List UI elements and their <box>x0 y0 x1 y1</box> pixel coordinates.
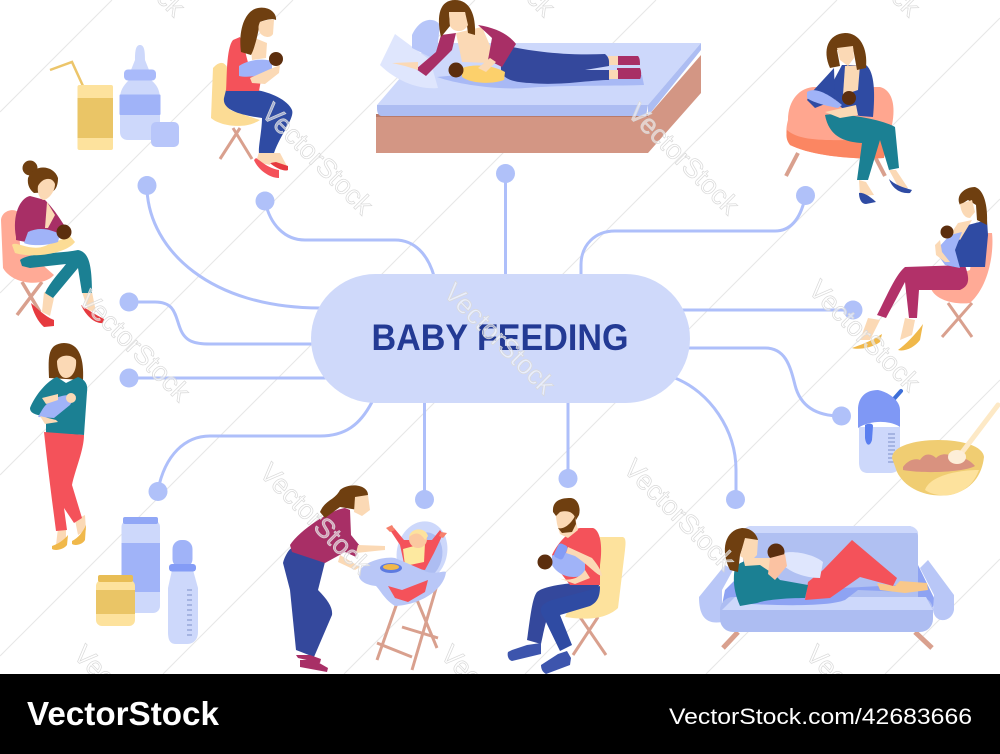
figure: standing mother with baby <box>30 343 87 550</box>
watermarks: VectorStock <box>254 457 377 581</box>
figure: mother nursing on couch <box>699 526 954 648</box>
central pill: baby feeding <box>311 274 690 403</box>
footer bar <box>0 674 1000 754</box>
figure: mother on yellow chair nursing <box>211 8 292 178</box>
connector lines <box>129 175 853 500</box>
watermarks: VectorStock <box>438 277 561 401</box>
watermarks: VectorStock <box>618 453 741 577</box>
connector dots <box>120 164 862 509</box>
watermarks: VectorStock <box>256 97 379 221</box>
watermarks: VectorStock <box>73 284 196 408</box>
figure: mother nursing in orange armchair <box>786 33 912 204</box>
bed <box>376 43 701 153</box>
figure: mother with nursing pillow <box>1 160 104 327</box>
icon: sippy cup and food bowl <box>858 390 998 496</box>
watermarks: VectorStock <box>803 274 926 398</box>
title: BABY FEEDING <box>372 317 628 358</box>
figure: mother nursing on peach chair <box>852 187 992 350</box>
figure: mother feeding baby in high chair <box>283 485 454 672</box>
footer url: VectorStock.com/42683666 <box>669 704 972 729</box>
footer logo text: VectorStock <box>27 695 220 732</box>
figure: mother nursing lying on bed <box>376 0 701 153</box>
icon: formula jar, puree jar and bottle <box>96 517 198 644</box>
figure: father bottle feeding baby <box>508 498 626 674</box>
watermarks: VectorStock <box>622 97 745 221</box>
icon: juice box and baby bottle <box>50 45 179 150</box>
